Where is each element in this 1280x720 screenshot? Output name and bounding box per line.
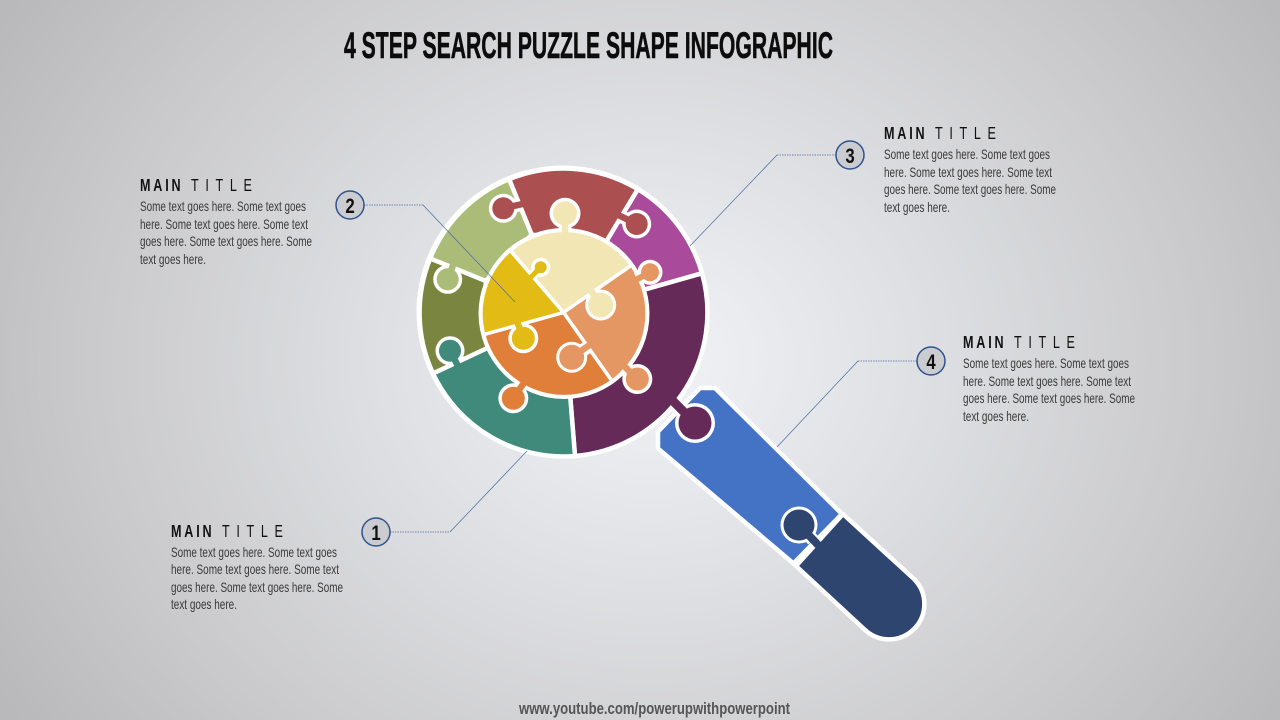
callout 1: [171, 451, 527, 612]
heading 3: [884, 124, 996, 144]
text block 1: Some text goes here. Some text goes: [171, 544, 337, 560]
number badge 1: 1: [371, 522, 381, 546]
outer piece: red: [509, 169, 638, 241]
heading 4: [963, 333, 1075, 353]
title: 4 STEP SEARCH PUZZLE SHAPE INFOGRAPHIC: [344, 25, 833, 66]
connector line 4: [777, 361, 917, 447]
connector line 2: [364, 205, 515, 302]
heading 4: MAIN: [963, 333, 1004, 353]
text block 1: here. Some text goes here. Some text: [171, 561, 339, 577]
callout 3: [690, 124, 1056, 246]
text block 3: Some text goes here. Some text goes: [884, 146, 1050, 162]
text block 2: text goes here.: [140, 251, 206, 267]
knob: cream into light orange: [585, 285, 616, 320]
inner piece: cream: [510, 230, 632, 312]
number badge 3: [836, 141, 864, 169]
text block 3: [884, 146, 1056, 215]
handle: blue puzzle piece: [658, 388, 842, 564]
footer url: www.youtube.com/powerupwithpowerpoint: [518, 699, 790, 718]
text block 4: here. Some text goes here. Some text: [963, 373, 1131, 389]
number badge 1: [362, 518, 390, 546]
heading 2: MAIN: [140, 176, 181, 196]
knob: teal into olive: [436, 336, 464, 370]
text block 3: text goes here.: [884, 199, 950, 215]
outer piece: light green: [430, 179, 532, 281]
inner piece: light orange: [564, 265, 647, 381]
inner piece: yellow: [481, 250, 564, 335]
text block 3: goes here. Some text goes here. Some: [884, 181, 1056, 197]
knob: dark purple into blue: [668, 396, 715, 443]
outer piece: olive: [420, 258, 487, 373]
text block 1: goes here. Some text goes here. Some: [171, 579, 343, 595]
knob: navy into blue: [780, 506, 821, 548]
knob: red into light green: [489, 194, 527, 223]
text block 2: [140, 198, 312, 267]
heading 4: TITLE: [1014, 333, 1075, 353]
magnifier handle: [658, 388, 924, 639]
handle: navy puzzle piece: [796, 514, 924, 639]
text block 4: Some text goes here. Some text goes: [963, 355, 1129, 371]
knob: light orange into orange: [556, 342, 594, 373]
heading 2: TITLE: [191, 176, 252, 196]
knob: light orange into purple: [630, 260, 662, 285]
heading 1: [171, 522, 283, 542]
heading 3: MAIN: [884, 124, 925, 144]
knob: orange into teal: [498, 377, 528, 413]
knob: cream into red: [550, 198, 580, 238]
outer piece: teal: [433, 348, 575, 456]
text block 2: here. Some text goes here. Some text: [140, 216, 308, 232]
knob: yellow into cream: [526, 258, 550, 282]
number badge 4: [917, 347, 945, 375]
text block 1: [171, 544, 343, 612]
knob: light orange into dark purple: [618, 360, 652, 394]
magnifier lens puzzle: [416, 166, 715, 458]
knob: red into purple: [614, 210, 651, 238]
number badge 2: 2: [345, 195, 355, 219]
callout 2: [140, 176, 515, 302]
connector line 1: [390, 451, 527, 532]
knob: yellow into orange: [508, 316, 538, 353]
heading 1: TITLE: [222, 522, 283, 542]
callout 4: [777, 333, 1135, 447]
heading 1: MAIN: [171, 522, 212, 542]
inner piece: orange: [484, 312, 612, 397]
heading 2: [140, 176, 252, 196]
knob: light green into olive: [433, 260, 462, 294]
text block 1: text goes here.: [171, 596, 237, 612]
text block 4: goes here. Some text goes here. Some: [963, 390, 1135, 406]
heading 3: TITLE: [935, 124, 996, 144]
outer piece: dark purple: [570, 273, 707, 456]
number badge 3: 3: [845, 145, 855, 169]
outer piece: purple: [607, 189, 702, 290]
text block 2: goes here. Some text goes here. Some: [140, 233, 312, 249]
text block 4: text goes here.: [963, 408, 1029, 424]
connector line 3: [690, 155, 836, 246]
text block 4: [963, 355, 1135, 424]
number badge 2: [336, 191, 364, 219]
text block 3: here. Some text goes here. Some text: [884, 164, 1052, 180]
number badge 4: 4: [926, 351, 936, 375]
text block 2: Some text goes here. Some text goes: [140, 198, 306, 214]
